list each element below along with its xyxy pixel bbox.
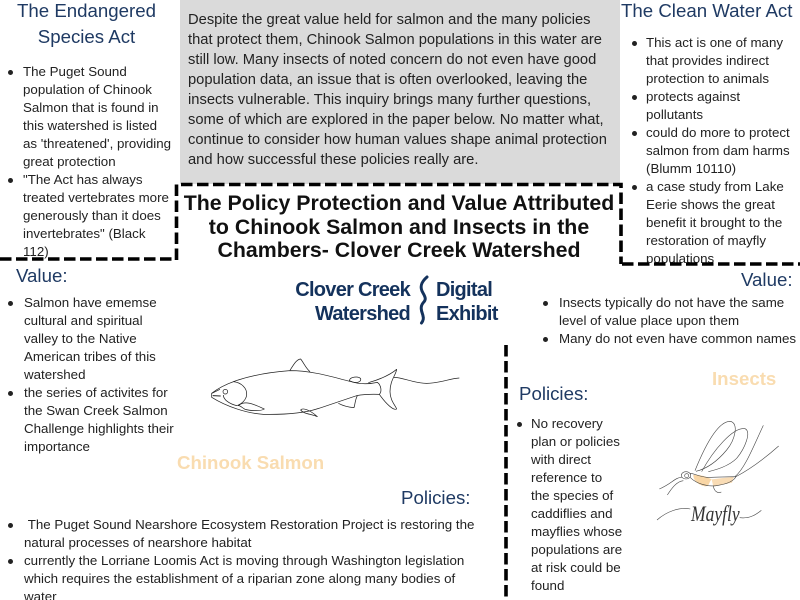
logo: Clover Creek Watershed Digital Exhibit: Exhibit <box>436 303 498 325</box>
text block: Clean Water Act bullets: pollutants <box>646 107 703 122</box>
text block: insect policies bullets: with direct <box>531 452 591 467</box>
title box with dashed border: to Chinook Salmon and Insects in the <box>209 214 589 238</box>
text block: Clean Water Act bullets: This act is one of many <box>646 35 783 50</box>
text block: salmon value bullets: importance <box>24 439 90 454</box>
text block: salmon value bullets: watershed <box>24 367 86 382</box>
title box with dashed border: Chambers- Clover Creek Watershed <box>217 238 581 262</box>
text block: Clean Water Act bullets: (Blumm 10110) <box>646 161 736 176</box>
text block: salmon value bullets: Salmon have ememse <box>24 295 157 310</box>
text block: insect policies bullets: No recovery <box>531 416 603 431</box>
text block: Clean Water Act bullets: protects against <box>646 89 740 104</box>
text block: Endangered Species Act bullets: Salmon that is found in <box>23 100 159 115</box>
text block: insect policies bullets: plan or policies <box>531 434 620 449</box>
text block: Endangered Species Act bullets: great protection <box>23 154 116 169</box>
text block: insect value bullets: Many do not even have common names <box>559 331 796 346</box>
label: Chinook Salmon: Chinook Salmon <box>177 452 324 473</box>
heading: Policies (insects): Policies: <box>519 383 588 404</box>
logo: Clover Creek Watershed Digital Exhibit: Watershed <box>315 303 410 325</box>
text block: Clean Water Act bullets: populations <box>646 251 714 266</box>
label: Mayfly script with flourish <box>656 501 762 526</box>
text block: Endangered Species Act bullets: as 'threatened', providing <box>23 136 171 151</box>
text block: salmon value bullets: valley to the Native <box>24 331 137 346</box>
text block: Endangered Species Act bullets: treated vertebrates more <box>23 190 169 205</box>
panel: intro text: population data, an issue that is often overlooked, leaving the <box>188 72 587 88</box>
label: Mayfly script with flourish: Mayfly <box>690 501 740 526</box>
text block: Clean Water Act bullets: a case study from Lake <box>646 179 784 194</box>
text block: Endangered Species Act bullets: invertebrates" (Black <box>23 226 146 241</box>
title box with dashed border <box>174 182 623 264</box>
text block: Clean Water Act bullets <box>632 35 790 266</box>
text block: salmon value bullets: cultural and spiritual <box>24 313 143 328</box>
text block: Endangered Species Act bullets: population of Chinook <box>23 82 152 97</box>
logo: Clover Creek Watershed Digital Exhibit: Digital <box>436 279 492 301</box>
logo: Clover Creek Watershed Digital Exhibit <box>295 275 498 325</box>
text block: salmon policies bullets: currently the Lorriane Loomis Act is moving through Washington legislation <box>24 553 464 568</box>
text block: salmon policies bullets: which requires the establishment of a riparian zone along many bodies of <box>24 571 455 586</box>
text block: insect policies bullets: caddiflies and <box>531 506 613 521</box>
text block: Clean Water Act bullets: restoration of mayfly <box>646 233 766 248</box>
text block: insect policies bullets: found <box>531 578 564 593</box>
text block: Clean Water Act bullets: protection to animals <box>646 71 769 86</box>
text block: insect value bullets: level of value place upon them <box>559 313 739 328</box>
text block: salmon value bullets: the Swan Creek Salmon <box>24 403 168 418</box>
text block: salmon policies bullets: The Puget Sound Nearshore Ecosystem Restoration Project is restoring the <box>28 517 474 532</box>
text block: Endangered Species Act bullets: 112) <box>23 244 49 259</box>
text block: insect value bullets: Insects typically do not have the same <box>559 295 784 310</box>
text block: salmon policies bullets: natural processes of nearshore habitat <box>24 535 251 550</box>
text block: salmon value bullets: the series of activites for <box>24 385 168 400</box>
text block: salmon value bullets: Challenge highlights their <box>24 421 174 436</box>
dashed divider vertical <box>504 345 508 596</box>
text block: salmon value bullets: American tribes of this <box>24 349 156 364</box>
heading: The Endangered Species Act <box>17 0 156 47</box>
panel: intro text <box>180 0 620 184</box>
panel: intro text: continue to consider how human values shape animal protection <box>188 132 607 148</box>
text block: Endangered Species Act bullets: The Puget Sound <box>23 64 127 79</box>
text block: Clean Water Act bullets: that provides indirect <box>646 53 769 68</box>
text block: insect policies bullets: populations are <box>531 542 622 557</box>
heading: The Clean Water Act: The Clean Water Act <box>621 0 792 21</box>
illustration: mayfly line drawing <box>659 421 779 496</box>
text block: insect policies bullets: at risk could be <box>531 560 621 575</box>
text block: Clean Water Act bullets: Eerie shows the great <box>646 197 775 212</box>
text block: insect value bullets <box>543 295 796 346</box>
panel: intro text: still low. Many insects of noted concern do not even have good <box>188 52 596 68</box>
text block: salmon value bullets <box>8 295 174 454</box>
panel: intro text: and how successful these policies really are. <box>188 152 478 168</box>
label: Insects: Insects <box>712 368 776 389</box>
text block: Clean Water Act bullets: salmon from dam harms <box>646 143 790 158</box>
dashed divider left <box>0 257 172 261</box>
text block: Endangered Species Act bullets <box>8 64 171 259</box>
panel: intro text: insects vulnerable. This inquiry brings many further questions, <box>188 92 591 108</box>
logo: Clover Creek Watershed Digital Exhibit: Clover Creek <box>295 279 410 301</box>
text block: insect policies bullets: the species of <box>531 488 613 503</box>
illustration: Chinook salmon line drawing <box>211 358 460 417</box>
text block: insect policies bullets <box>517 416 622 593</box>
dashed divider right <box>622 262 800 266</box>
text block: Endangered Species Act bullets: "The Act has always <box>23 172 143 187</box>
text block: Clean Water Act bullets: could do more to protect <box>646 125 790 140</box>
heading: The Endangered Species Act: The Endangered <box>17 0 156 21</box>
text block: Endangered Species Act bullets: generously than it does <box>23 208 161 223</box>
text block: insect policies bullets: mayflies whose <box>531 524 622 539</box>
text block: Endangered Species Act bullets: this watershed is listed <box>23 118 157 133</box>
title box with dashed border: The Policy Protection and Value Attributed <box>184 191 614 215</box>
heading: Value (salmon): Value: <box>16 265 68 286</box>
panel: intro text: that protect them, Chinook Salmon populations in this water are <box>188 32 602 48</box>
panel: intro text: Despite the great value held for salmon and the many policies <box>188 12 591 28</box>
heading: The Endangered Species Act: Species Act <box>38 26 135 46</box>
heading: Policies (salmon): Policies: <box>401 487 470 508</box>
panel: intro text: some of which are explored in the paper below. No matter what, <box>188 112 604 128</box>
text block: insect policies bullets: reference to <box>531 470 602 485</box>
heading: Value (insects): Value: <box>741 269 793 290</box>
text block: salmon policies bullets <box>8 517 474 600</box>
text block: Clean Water Act bullets: benefit it brought to the <box>646 215 782 230</box>
